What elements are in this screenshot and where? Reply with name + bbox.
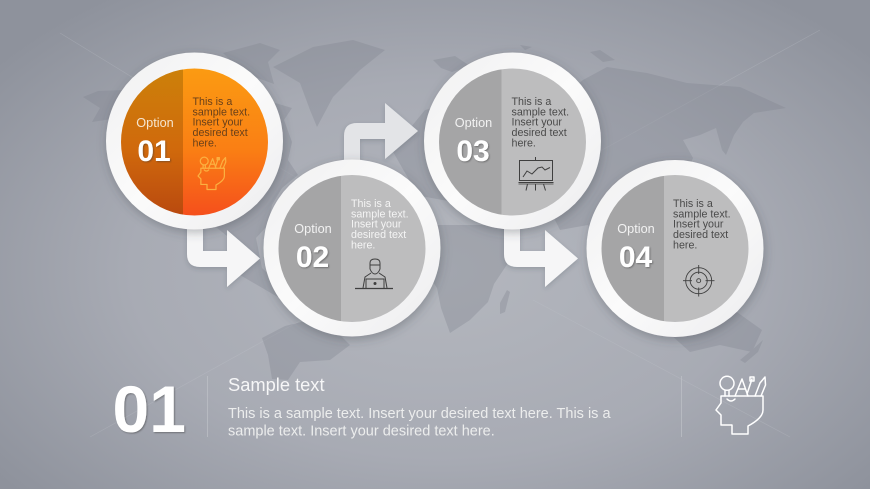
footer divider left [206,376,208,437]
map: Asia [540,67,786,300]
icon: target [683,265,714,296]
label 03: Option [455,116,492,130]
description 02: here. [351,239,375,251]
map: New Zealand [740,340,763,363]
panel: option 03 [424,52,601,230]
map: South America [262,320,350,380]
panel: option 04 [586,160,764,337]
map: Europe [392,90,540,205]
number 04: 04 [619,241,652,274]
arrow: from option 1 to option 2 [187,222,260,287]
description 01: sample text. [192,106,250,118]
label 02: Option [294,222,332,236]
description 04: Insert your [673,219,724,231]
number 02: 02 [296,241,329,274]
description 01: desired text [192,127,248,139]
ring 03 [424,52,601,230]
panel: option 02 [264,160,440,336]
panel: option 01 [106,52,283,230]
description 04: This is a [673,198,713,210]
map: Africa [420,225,520,333]
map: Greenland [273,40,385,127]
disc 01 [120,68,269,216]
description 03: This is a [512,96,551,108]
arrow: from option 3 to option 4 [504,222,578,287]
description 04: here. [673,239,697,251]
description 02: desired text [351,229,406,241]
description 02: This is a [351,198,391,210]
disc 02 [278,175,427,323]
description 02: sample text. [351,208,409,220]
description 03: sample text. [512,106,569,118]
description 02: Insert your [351,219,402,231]
description 01: Insert your [192,117,243,129]
ring 02 [264,160,440,336]
footer number: 01 [112,372,186,446]
arrow: from option 2 to option 3 [344,103,418,170]
disc 03 [438,68,588,216]
map: Arctic islands [433,45,615,72]
icon: person at laptop [355,259,393,288]
icon: head with ideas (orange) [198,157,226,189]
ring 01 [106,52,283,230]
icon: presentation chart [518,157,554,190]
label 04: Option [617,222,655,236]
map: Arctic Canada [223,43,280,84]
map: North America [83,80,300,310]
ring 04 [586,160,764,337]
footer heading: Sample text [228,374,325,395]
description 03: here. [512,137,536,149]
number 01: 01 [137,135,171,168]
world map [83,40,786,380]
map: Australia [660,300,762,352]
description 04: desired text [673,229,728,241]
label 01: Option [136,116,174,130]
description 03: desired text [512,127,567,139]
map: Japan [722,122,743,155]
disc 04 [601,175,750,323]
footer description: This is a sample text. Insert your desired text here. This is a [228,406,611,422]
footer divider right [680,376,682,437]
description 03: Insert your [512,117,562,129]
description 04: sample text. [673,208,731,220]
map: Madagascar [500,290,510,314]
footer description: sample text. Insert your desired text here. [228,424,495,440]
number 03: 03 [456,135,490,168]
icon: head with ideas (white) [716,376,766,434]
description 01: This is a [192,96,232,108]
description 01: here. [192,137,217,149]
